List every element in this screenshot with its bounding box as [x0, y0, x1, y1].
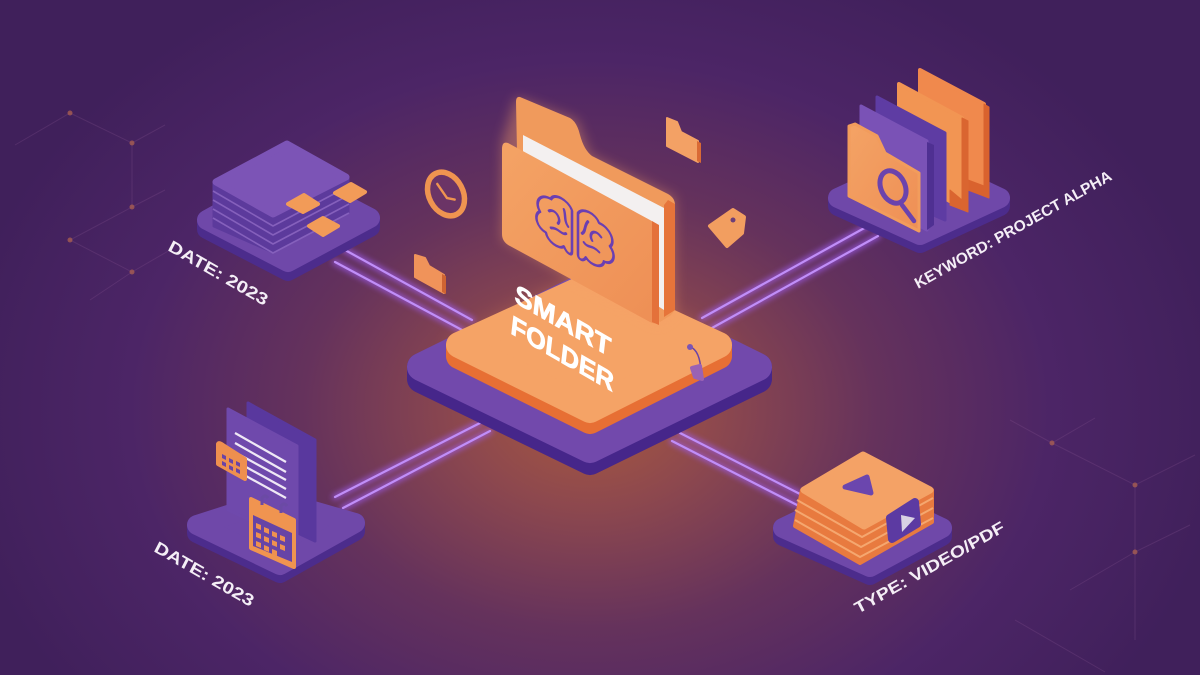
title: smart folder: SMART	[513, 280, 613, 363]
platform	[207, 175, 370, 271]
icon: small calendar	[218, 443, 245, 479]
connector: bottom left	[335, 423, 490, 508]
node: bottom right media stack	[783, 455, 942, 575]
connector: bottom right	[672, 433, 800, 505]
icon: clock	[420, 166, 472, 222]
connector: top left	[335, 250, 472, 330]
white paper	[523, 135, 664, 310]
orange plate	[459, 285, 719, 421]
tag pin on plate edge	[687, 344, 702, 379]
icon: tag	[710, 210, 744, 246]
icon: video tile	[890, 502, 917, 539]
orange sheet front	[899, 84, 968, 212]
icon: small folder left	[415, 255, 446, 294]
icon: small folder top	[667, 118, 701, 163]
front folder	[849, 124, 919, 231]
label: type video pdf: TYPE: VIDEO/PDF	[851, 517, 1008, 617]
label: keyword project alpha: KEYWORD: PROJECT ALPHA	[912, 167, 1115, 292]
front document	[228, 409, 297, 542]
orange sheet back	[920, 70, 989, 198]
platform	[783, 490, 942, 575]
text lines	[235, 433, 286, 498]
back document	[248, 403, 315, 541]
purple base	[421, 284, 758, 461]
network decoration: bottom right	[1010, 418, 1195, 672]
label: date 2023 top: DATE: 2023	[165, 237, 271, 309]
central platform	[421, 270, 758, 461]
title: smart folder: FOLDER	[509, 311, 616, 398]
label: date 2023 bottom: DATE: 2023	[151, 538, 257, 610]
node: top right keyword folders	[838, 70, 1000, 243]
back panel	[516, 97, 675, 322]
icon: large calendar	[251, 496, 294, 567]
node: bottom left document and calendars	[197, 403, 355, 573]
front panel	[502, 143, 658, 323]
orange tiles	[288, 184, 365, 235]
back panel right edge	[664, 200, 675, 317]
central folder	[502, 97, 675, 325]
platform	[197, 500, 355, 573]
connector: top right	[702, 226, 878, 328]
icon: brain	[536, 186, 614, 276]
folder glow	[502, 97, 675, 325]
front panel edge	[652, 221, 659, 325]
glow	[446, 270, 732, 430]
orange stacked layers	[795, 455, 933, 563]
platform	[838, 160, 1000, 243]
icon: play triangle on top	[845, 477, 871, 493]
layered sheets	[213, 144, 349, 253]
icon: magnifier	[875, 167, 914, 221]
purple sheets	[861, 97, 945, 230]
title: smart folder	[509, 280, 616, 398]
network decoration: top left	[15, 110, 170, 300]
node: top left stacked layers	[207, 144, 370, 271]
